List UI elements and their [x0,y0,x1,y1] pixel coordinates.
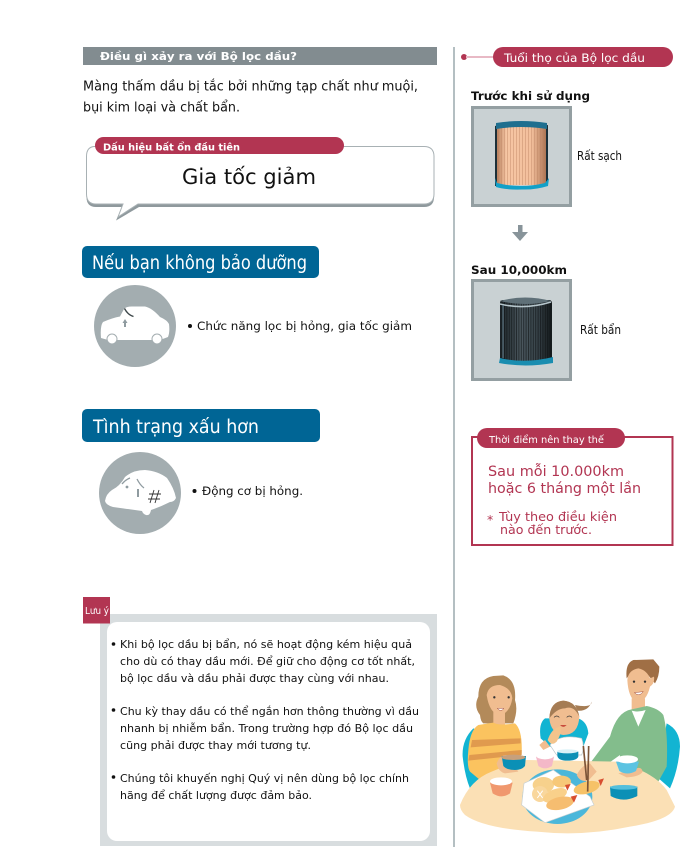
replacement interval text [488,463,641,497]
callout text: Gia tốc giảm [182,165,316,190]
footnote: nào đến trước. [500,522,592,537]
rice bowl pink [536,752,554,768]
replacement interval text: hoặc 6 tháng một lần [488,481,641,497]
photo: clean filter [472,108,570,206]
section heading: what happens to the oil filter [83,47,437,65]
note 1: Khi bộ lọc dầu bị bẩn, nó sẽ hoạt động kém hiệu quả [120,638,412,651]
food and dishes [490,746,643,824]
child [539,701,592,755]
intro text block [83,80,418,116]
tempura platter [522,769,604,824]
table [460,760,675,833]
stacked bowls [610,785,637,800]
rice bowl blue [616,755,643,777]
note tag [83,597,110,624]
panel label pill [477,428,625,448]
note 2: nhanh bị nhiễm bẩn. Trong trường hợp đó Bộ lọc dầu [120,722,413,735]
section heading: what happens to the oil filter: Điều gì xảy ra với Bộ lọc dầu? [100,50,297,63]
heading: oil filter lifespan: Tuổi thọ của Bộ lọc dầu [503,51,645,65]
note 3: Chúng tôi khuyến nghị Quý vị nên dùng bộ lọc chính [120,772,409,785]
note 2: cũng phải được thay mới tương tự. [120,739,311,752]
label: after 10,000 km: Sau 10,000km [471,263,567,277]
child's bowl [557,749,578,761]
heading: condition worsens [82,409,320,442]
chairs [463,718,680,788]
man [590,659,667,782]
callout label pill [95,137,344,154]
column divider [453,47,455,847]
panel: notes [83,597,437,846]
callout label pill: Dấu hiệu bất ổn đầu tiên [103,142,240,154]
panel: replacement timing [472,428,672,545]
callout: first sign of trouble [86,137,434,220]
note 2: Chu kỳ thay dầu có thể ngắn hơn thông thường vì dầu [120,705,419,718]
icon: sad car [94,285,176,367]
woman [468,675,522,780]
arrow: down [512,225,528,241]
replacement interval text: Sau mỗi 10.000km [488,463,624,480]
footnote: Tùy theo điều kiện [498,509,617,524]
rice bowl orange [490,777,513,796]
panel background [100,614,437,846]
note 3: hãng để chất lượng được đảm bảo. [120,789,312,802]
caption: very clean: Rất sạch [577,149,622,163]
woman's bowl [497,755,526,773]
label: before use: Trước khi sử dụng [471,89,590,103]
footnote [487,509,617,537]
heading: condition worsens: Tình trạng xấu hơn [92,417,259,438]
speech bubble shape [86,146,434,220]
footnote: * [487,512,493,527]
icon: broken-down car [99,452,181,534]
note 1: cho dù có thay dầu mới. Để giữ cho động cơ tốt nhất, [120,655,415,668]
note 2 [112,705,419,752]
heading: if you do not maintain: Nếu bạn không bảo dưỡng [92,253,307,274]
bullet text: filter function damaged: Chức năng lọc bị hỏng, gia tốc giảm [197,319,412,333]
illustration: family at the table [460,659,680,833]
note 1: bộ lọc dầu và dầu phải được thay cùng với nhau. [120,672,389,685]
intro text block: bụi kim loại và chất bẩn. [83,100,240,116]
intro text block: Màng thấm dầu bị tắc bởi những tạp chất như muội, [83,80,418,94]
man's hand and chopsticks [577,746,597,792]
note tag: Lưu ý [85,605,109,617]
heading: if you do not maintain [82,246,319,278]
photo: dirty filter [472,280,570,380]
note 1 [112,638,415,685]
bullet text: engine damaged: Động cơ bị hỏng. [202,484,303,498]
heading: oil filter lifespan [461,47,673,67]
panel label pill: Thời điểm nên thay thế [488,433,605,446]
note 3 [112,772,409,802]
caption: very dirty: Rất bẩn [580,323,621,337]
